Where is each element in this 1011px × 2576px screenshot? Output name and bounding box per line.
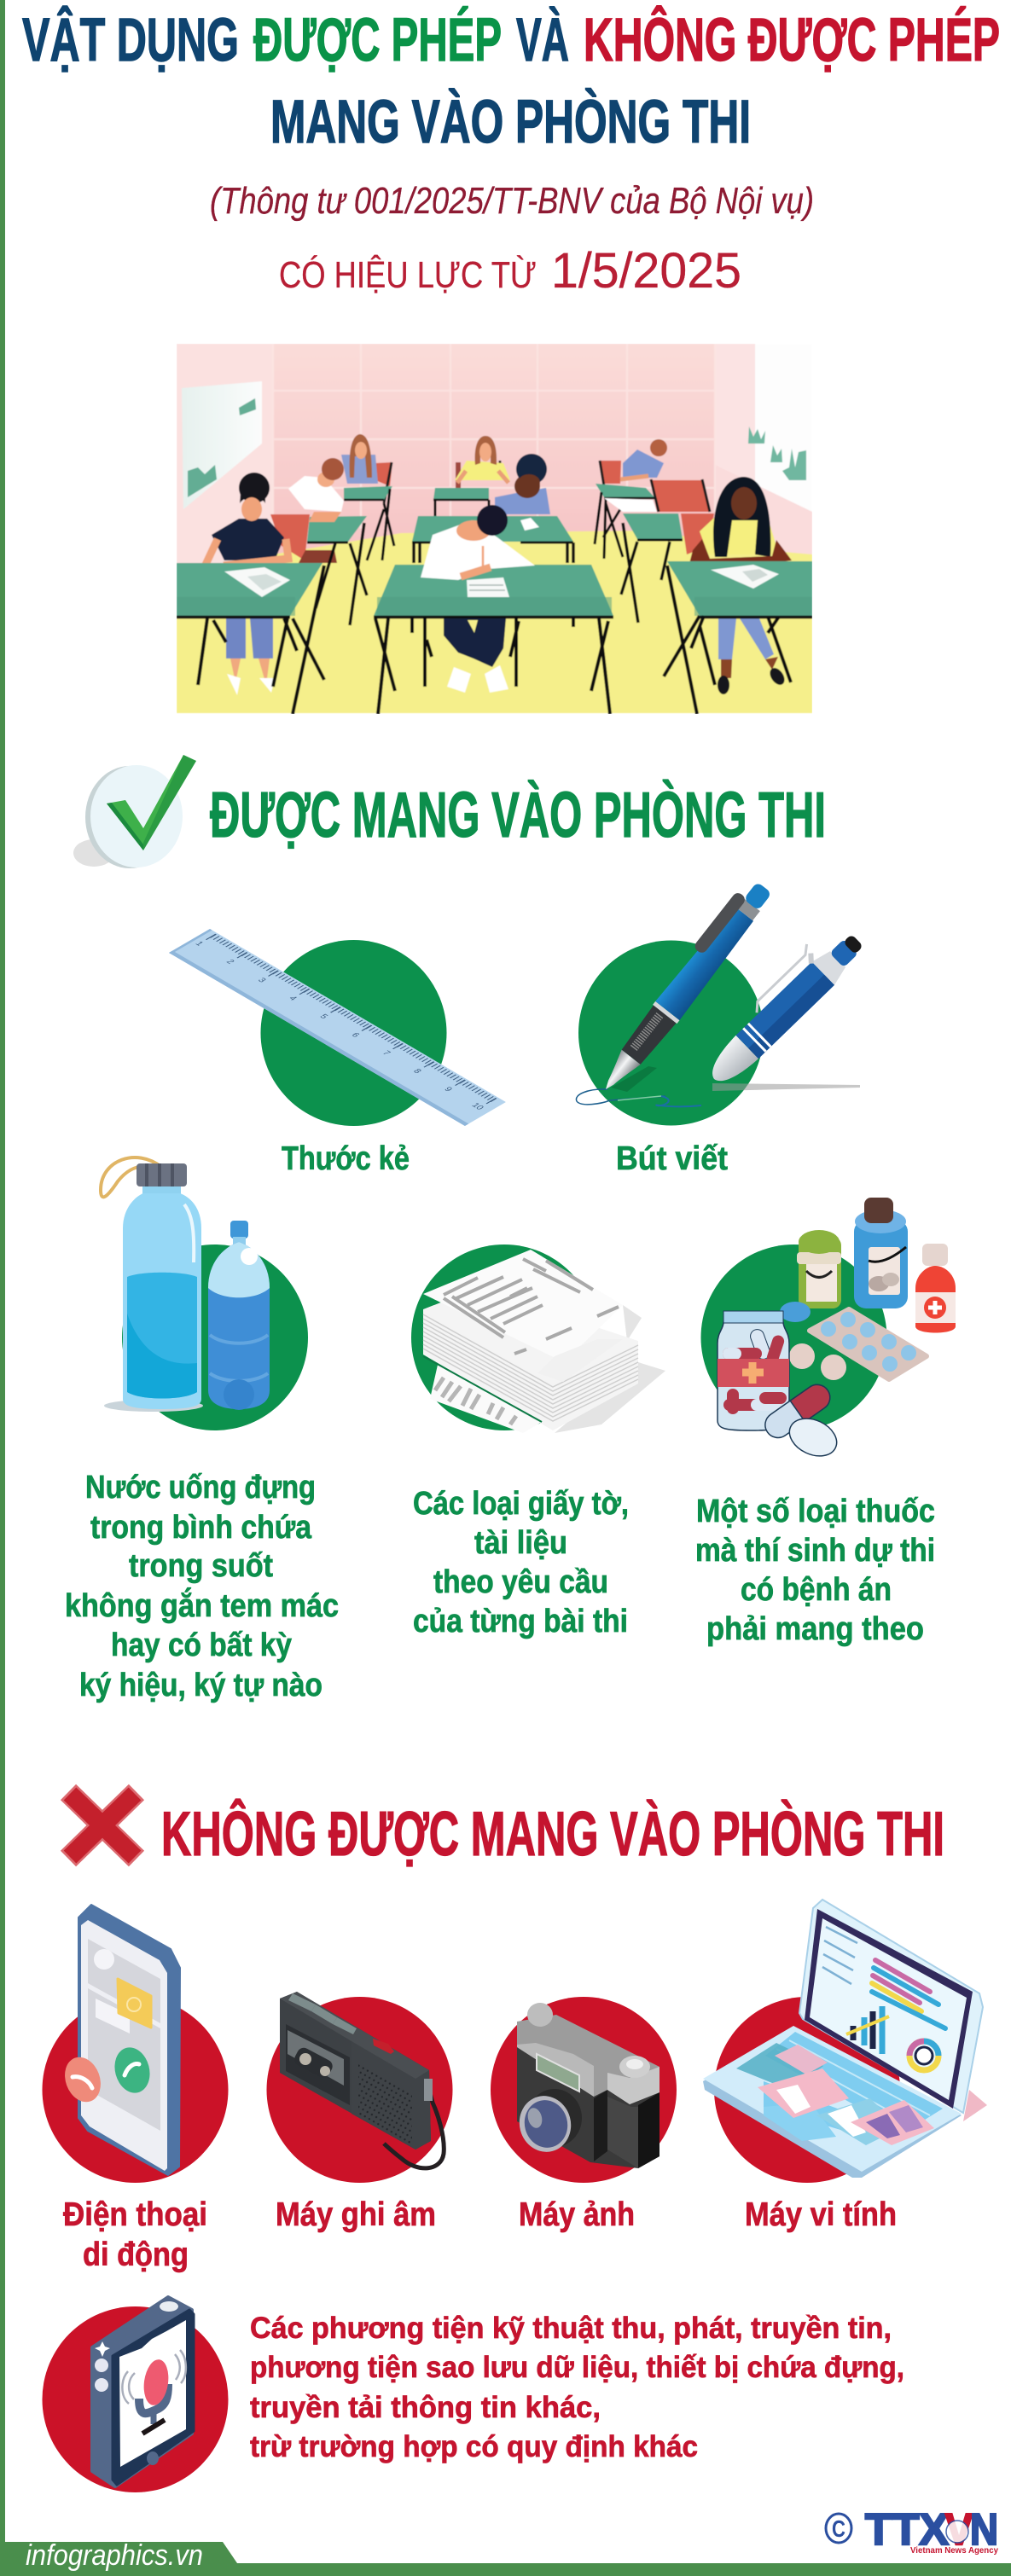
second row desk legs — [316, 523, 670, 625]
description: truyền tải thông tin khác, — [250, 2391, 601, 2424]
middle left white-shirt student hand area — [309, 512, 341, 522]
logo: TTXVN: TTX — [865, 2505, 949, 2555]
description: trong suốt — [129, 1548, 273, 1584]
logo: TTXVN — [826, 2505, 998, 2556]
icon: two pens on green circle — [576, 875, 869, 1126]
description: phương tiện sao lưu dữ liệu, thiết bị chứa đựng, — [250, 2351, 904, 2384]
title: MANG VÀO PHÒNG THI — [270, 89, 751, 156]
description: theo yêu cầu — [433, 1564, 608, 1600]
icon: ruler on green circle: 6 — [349, 1031, 362, 1039]
item: ruler — [169, 929, 506, 1177]
front centre student — [421, 505, 535, 693]
icon: ruler on green circle: 7 — [380, 1050, 392, 1057]
description: có bệnh án — [741, 1572, 892, 1608]
icon: water bottles on green circle — [101, 1157, 308, 1430]
description — [695, 1494, 935, 1647]
label — [63, 2196, 207, 2273]
back row chairs — [375, 461, 710, 512]
front right student — [689, 477, 792, 694]
middle row student: dark-haired boy — [495, 454, 550, 514]
item: other devices — [43, 2297, 904, 2492]
label: Bút viết — [616, 1140, 728, 1177]
label: Máy vi tính — [745, 2196, 897, 2233]
footer site name: infographics.vn — [26, 2539, 203, 2572]
icon: ruler on green circle: 3 — [255, 977, 268, 984]
item: computer — [703, 1900, 987, 2233]
icon: recorder on red circle — [266, 1992, 452, 2183]
icon: ruler on green circle: 1 — [193, 940, 206, 948]
item: camera — [491, 1997, 677, 2233]
section heading: allowed — [73, 755, 826, 868]
description — [65, 1470, 339, 1703]
left border bar — [0, 0, 5, 2576]
item: water bottles — [65, 1157, 339, 1703]
title: VẬT DỤNG — [22, 6, 239, 74]
section heading: not allowed — [68, 1792, 944, 1869]
icon: medicines on green circle — [701, 1198, 956, 1463]
description: không gắn tem mác — [65, 1587, 339, 1624]
description: Nước uống đựng — [85, 1470, 316, 1506]
effective date — [279, 243, 741, 299]
description: phải mang theo — [706, 1611, 924, 1647]
description: mà thí sinh dự thi — [695, 1533, 935, 1569]
whiteboard — [182, 381, 262, 509]
description: của từng bài thi — [413, 1604, 628, 1639]
legal basis subtitle: (Thông tư 001/2025/TT-BNV của Bộ Nội vụ) — [210, 180, 814, 222]
title — [22, 6, 1000, 156]
description: Một số loại thuốc — [696, 1494, 935, 1529]
second row chairs — [270, 513, 714, 560]
front desks — [177, 561, 812, 618]
title: VÀ — [516, 7, 569, 74]
description: tài liệu — [474, 1525, 567, 1561]
effective date: 1/5/2025 — [551, 243, 741, 299]
back row student: girl yellow shirt — [455, 436, 510, 483]
label: Máy ảnh — [519, 2196, 635, 2233]
plants — [748, 426, 806, 480]
back row student: boy white shirt — [288, 458, 344, 512]
label: Điện thoại — [63, 2196, 207, 2233]
icon: ruler on green circle: 4 — [287, 995, 299, 1002]
icon: recording phone on red circle — [43, 2297, 229, 2492]
description: trừ trường hợp có quy định khác — [250, 2430, 698, 2463]
back row student: boy blue shirt right — [620, 439, 667, 479]
description — [250, 2312, 904, 2463]
footer band — [0, 2539, 1011, 2576]
description: Các phương tiện kỹ thuật thu, phát, truyền tin, — [250, 2312, 892, 2345]
icon: check mark on disc — [73, 755, 196, 868]
front left student — [198, 473, 288, 695]
logo: TTXVN: Vietnam News Agency — [910, 2545, 998, 2556]
logo: TTXVN: C — [832, 2515, 845, 2542]
icon: laptop on red circle — [703, 1900, 987, 2183]
illustration: exam classroom — [177, 344, 812, 714]
icon: paper stack on green circle — [411, 1244, 665, 1433]
item: documents — [411, 1244, 665, 1639]
description: trong bình chứa — [90, 1510, 312, 1546]
title: ĐƯỢC PHÉP — [253, 7, 502, 74]
icon: camera on red circle — [491, 1997, 677, 2183]
item: pens — [576, 875, 869, 1177]
item: mobile phone — [43, 1905, 229, 2273]
back desk legs — [367, 489, 623, 560]
icon: ruler on green circle: 5 — [317, 1013, 330, 1020]
exam papers on front desks — [224, 565, 779, 597]
label: Máy ghi âm — [276, 2196, 436, 2233]
back row student: girl blue shirt — [341, 434, 378, 484]
icon: ruler on green circle: 8 — [411, 1068, 423, 1075]
icon: phone on red circle — [43, 1905, 229, 2183]
item: voice recorder — [266, 1992, 452, 2233]
icon: ruler on green circle — [169, 929, 506, 1126]
item: medicine — [695, 1198, 956, 1647]
description: ký hiệu, ký tự nào — [79, 1668, 322, 1703]
label: Thước kẻ — [282, 1140, 410, 1177]
front desk legs — [198, 566, 791, 714]
icon: ruler on green circle: 2 — [224, 959, 236, 966]
description: hay có bất kỳ — [111, 1627, 292, 1663]
third row desks — [344, 484, 654, 500]
effective date: CÓ HIỆU LỰC TỪ — [279, 254, 537, 296]
description: Các loại giấy tờ, — [413, 1486, 629, 1522]
description — [413, 1486, 629, 1639]
floor — [177, 531, 812, 713]
second row desks — [307, 513, 683, 542]
icon: ruler on green circle: 10 — [469, 1102, 485, 1111]
icon: ruler on green circle: 9 — [442, 1086, 454, 1094]
logo: TTXVN: N — [970, 2505, 998, 2555]
label: di động — [83, 2237, 189, 2273]
icon: red cross — [68, 1792, 137, 1859]
logo: TTXVN: V — [945, 2505, 973, 2555]
